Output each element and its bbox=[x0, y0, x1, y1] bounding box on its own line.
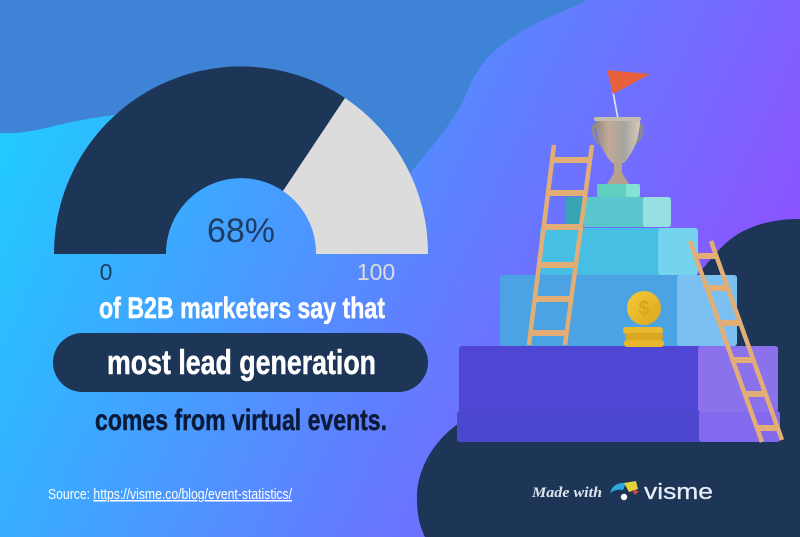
source line: Source: https://visme.co/blog/event-statistics/ bbox=[48, 486, 293, 503]
icon: trophy bbox=[593, 117, 642, 184]
illustration: podium with trophy bbox=[457, 70, 782, 442]
icon: visme logo bbox=[610, 481, 639, 500]
text line 3: comes from virtual events. bbox=[95, 404, 387, 437]
watermark: made with visme bbox=[531, 479, 713, 504]
gauge value: 68% bbox=[207, 212, 275, 250]
icon: left ladder bbox=[529, 145, 592, 345]
visme wordmark: visme bbox=[644, 479, 713, 504]
gauge minimum label: 0 bbox=[100, 259, 112, 285]
podium tier 3 bbox=[540, 228, 698, 275]
pill background bbox=[53, 333, 428, 392]
podium top step bbox=[597, 184, 640, 197]
icon: flag bbox=[607, 70, 650, 119]
pill text: most lead generation bbox=[107, 344, 376, 382]
highlighted pill bbox=[53, 333, 428, 392]
made with script text: Made with bbox=[531, 485, 602, 501]
podium tier 2 bbox=[500, 275, 737, 346]
podium base bbox=[457, 346, 780, 442]
text line 1: of B2B marketers say that bbox=[99, 292, 385, 325]
gauge: filled segment 68% bbox=[54, 66, 345, 254]
icon: gold coins bbox=[623, 291, 664, 347]
background blob: bottom right bbox=[417, 219, 800, 537]
icon: right ladder bbox=[690, 241, 782, 442]
gauge maximum label: 100 bbox=[357, 259, 395, 285]
icon: gold coins: $ bbox=[638, 298, 650, 320]
gauge: remaining segment bbox=[283, 98, 428, 254]
podium tier 4 bbox=[566, 197, 671, 227]
gauge chart bbox=[54, 66, 428, 285]
background blob: top left bbox=[0, 0, 586, 190]
